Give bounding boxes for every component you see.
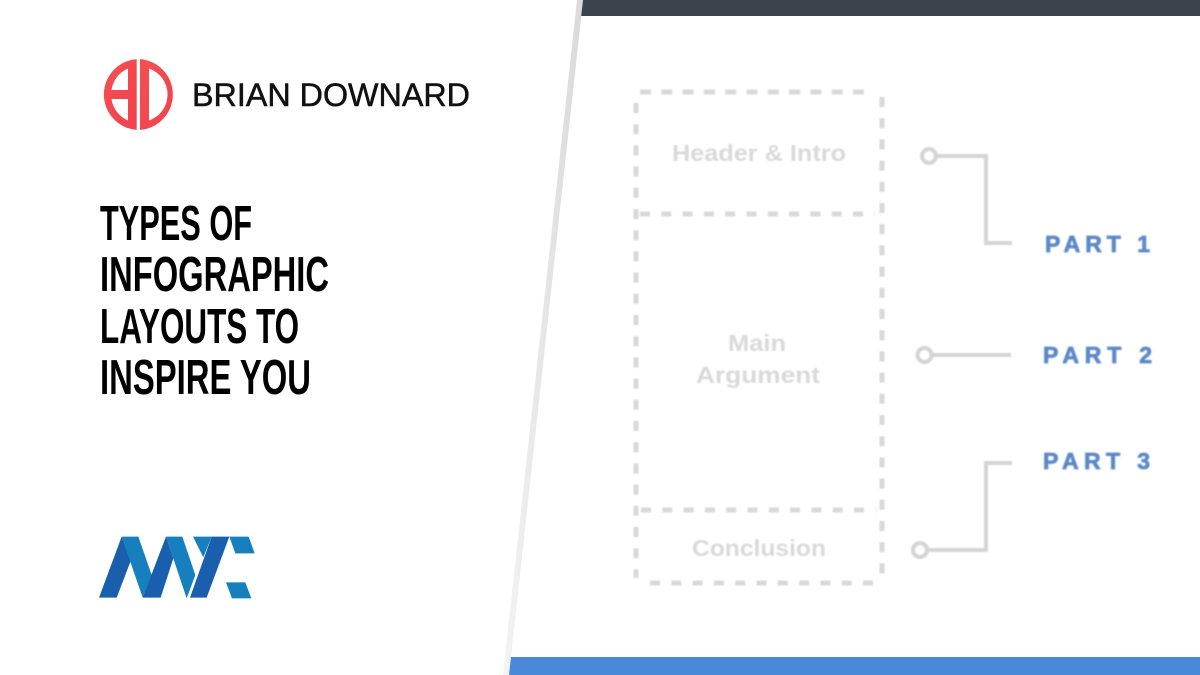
section label: Main Argument: Argument (696, 362, 820, 388)
label: PART 1: PART 1 (1045, 231, 1150, 257)
label: PART 3: PART 3 (1043, 448, 1150, 474)
section label: Main Argument: Main (728, 330, 786, 356)
title (100, 197, 329, 405)
section label: Header & Intro: Header & Intro (672, 140, 846, 166)
title: INFOGRAPHIC (100, 248, 329, 302)
section label: Conclusion: Conclusion (692, 535, 826, 561)
preview footer bar (509, 657, 1200, 675)
icon: BD monogram (104, 59, 173, 130)
icon: MT logo (99, 537, 255, 598)
title: LAYOUTS TO (100, 300, 299, 354)
label: PART 2: PART 2 (1043, 342, 1152, 368)
panel: slanted layout preview (503, 0, 1200, 675)
title: INSPIRE YOU (100, 351, 311, 405)
section label: Main Argument (696, 330, 820, 388)
slanted page edge (503, 0, 583, 675)
panel: brand logo Brian Downard (104, 59, 470, 130)
connector: part 2 (918, 348, 1011, 362)
preview header bar (581, 0, 1200, 16)
connector: part 1 (922, 149, 1012, 243)
brand name: BRIAN DOWNARD (192, 77, 470, 113)
connector: part 3 (913, 463, 1012, 557)
dashed layout wireframe (636, 92, 882, 583)
title: TYPES OF (100, 197, 252, 251)
